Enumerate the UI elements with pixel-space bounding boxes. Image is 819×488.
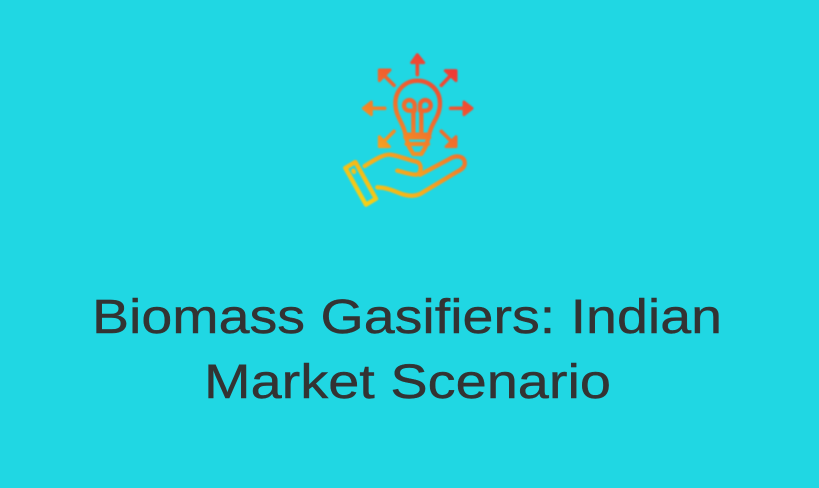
icon: light bulb on open hand with radiating arrows: [345, 55, 472, 205]
icon: open hand: [345, 155, 465, 205]
icon: radiating arrows: [363, 55, 472, 147]
icon: light bulb: [395, 81, 440, 154]
title: [92, 291, 722, 409]
title: Market Scenario: [204, 356, 611, 409]
title: Biomass Gasifiers: Indian: [92, 291, 722, 344]
